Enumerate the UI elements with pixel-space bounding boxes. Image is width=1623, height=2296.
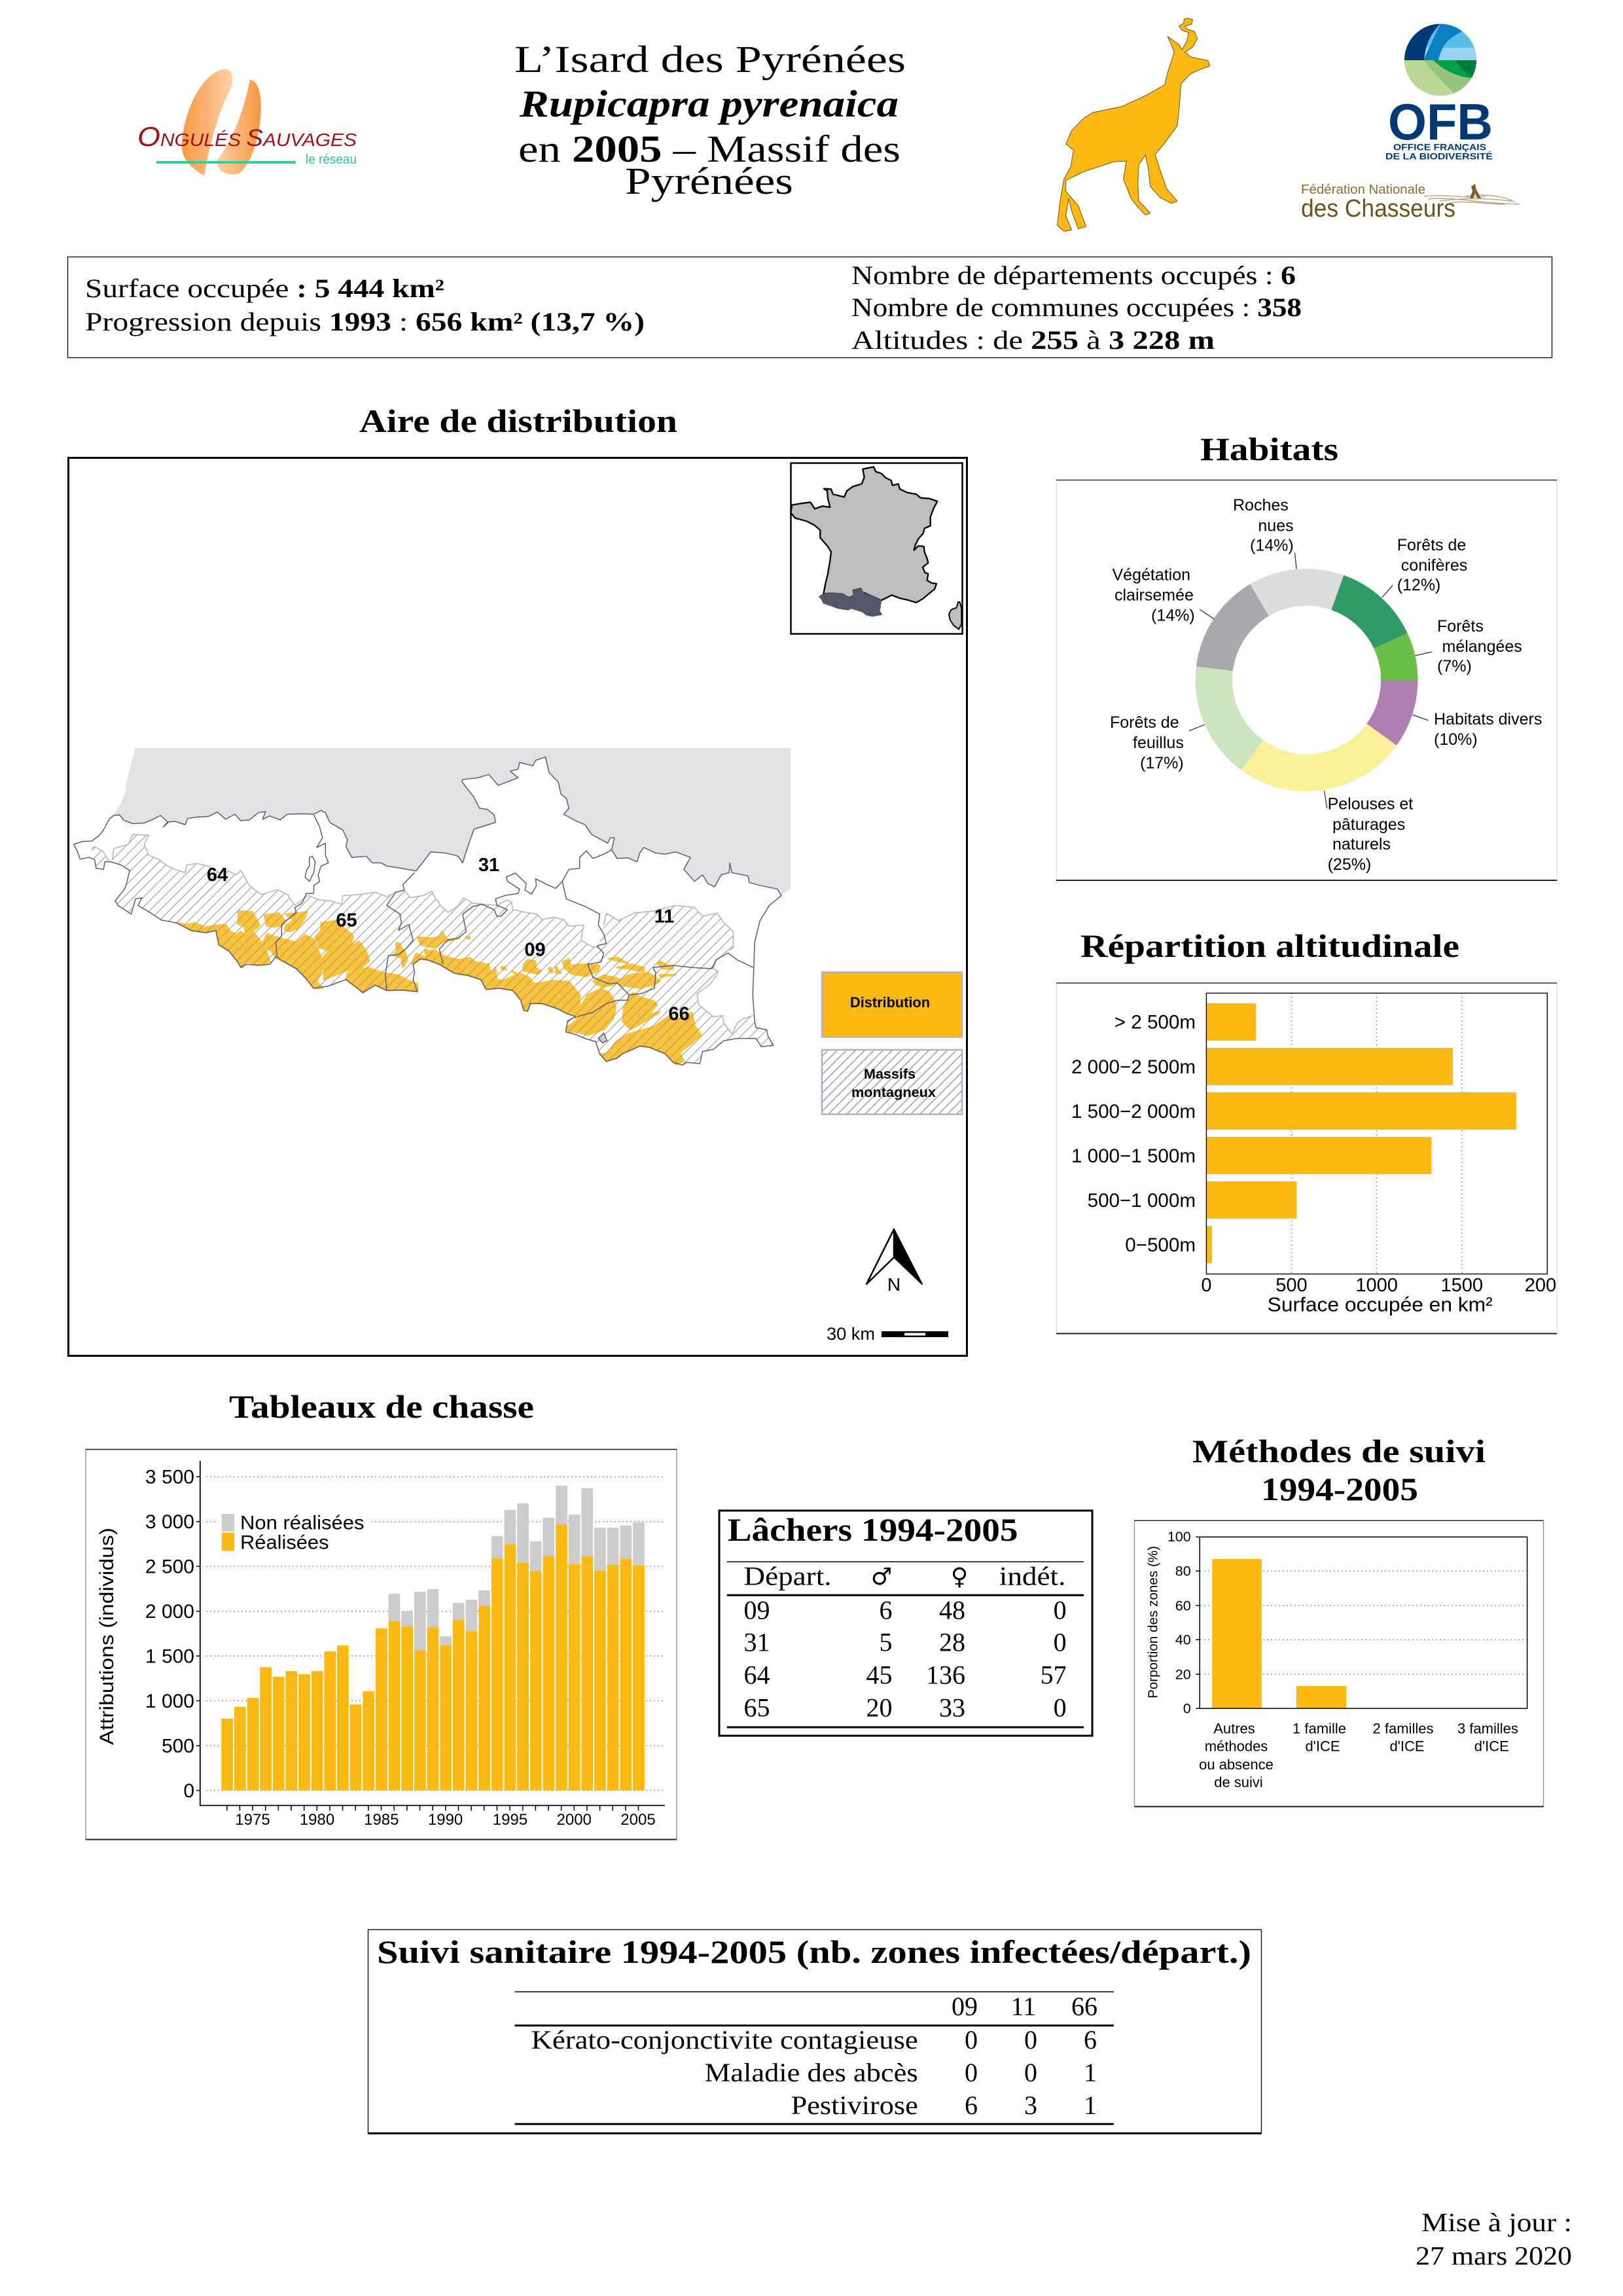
panel: habitats — [1056, 480, 1557, 880]
altitude axis values: 0 — [1201, 1275, 1211, 1296]
donut labels: pâturages — [1332, 816, 1405, 834]
methods y values: 100 — [1168, 1529, 1191, 1545]
table rows — [531, 2025, 1097, 2120]
table rows: 3 — [1024, 2090, 1037, 2120]
donut leader lines — [1189, 552, 1432, 808]
heading: Méthodes de suivi: Méthodes de suivi — [1192, 1433, 1486, 1469]
hunting y values: 3 000 — [145, 1511, 194, 1533]
logo: OFB: DE LA BIODIVERSITÉ — [1385, 151, 1493, 161]
methods x labels — [1199, 1720, 1518, 1791]
donut labels: nues — [1258, 516, 1294, 535]
icon: OFB landscape disc — [1404, 24, 1478, 97]
logo: Fédération Nationale des Chasseurs: Fédération Nationale — [1301, 183, 1425, 197]
donut labels: (10%) — [1434, 730, 1478, 749]
altitude gridlines — [1292, 993, 1462, 1274]
hunting x values: 2000 — [557, 1811, 592, 1829]
map: department borders east — [439, 757, 781, 1065]
map: department labels: 11 — [654, 906, 674, 927]
hunting x values: 1980 — [300, 1811, 334, 1829]
title: Rupicapra pyrenaica — [519, 82, 899, 125]
update note: Mise à jour : — [1421, 2208, 1572, 2237]
table header — [743, 1562, 1065, 1591]
table rules — [515, 1991, 1114, 1992]
methods y values: 40 — [1175, 1632, 1191, 1648]
table header: 66 — [1071, 1992, 1097, 2021]
table rows: 64 — [743, 1660, 770, 1690]
donut labels: Habitats divers — [1434, 710, 1542, 728]
map: massif outlines west — [92, 834, 459, 912]
table rows: 20 — [866, 1693, 893, 1723]
update note — [1416, 2208, 1572, 2270]
icon: north arrow — [866, 1229, 922, 1295]
summary text right — [851, 260, 1302, 355]
logo: Fédération Nationale des Chasseurs: des Chasseurs — [1301, 195, 1455, 223]
donut labels: clairsemée — [1115, 586, 1194, 605]
logo tagline: le réseau — [306, 152, 357, 167]
panel: Lâchers table — [719, 1511, 1092, 1736]
donut labels: conifères — [1401, 556, 1467, 575]
table rows: 48 — [939, 1595, 965, 1624]
methods x labels: d'ICE — [1305, 1738, 1340, 1755]
legend: distribution — [822, 973, 962, 1037]
hunting x values: 1995 — [493, 1811, 527, 1829]
map: department labels: 64 — [207, 865, 228, 886]
methods y title: Porportion des zones (%) — [1146, 1546, 1160, 1698]
methods x labels: de suivi — [1214, 1774, 1263, 1791]
map: distribution areas west — [177, 911, 460, 993]
altitude axis values: 500 — [1275, 1275, 1308, 1296]
methods x labels: méthodes — [1205, 1738, 1268, 1755]
icon: hoof — [182, 69, 261, 175]
map: department labels: 09 — [524, 940, 546, 961]
donut labels: (25%) — [1328, 855, 1371, 874]
table rows: 0 — [1024, 2025, 1037, 2054]
panel: hunting chart — [86, 1449, 677, 1839]
table rows: 1 — [1084, 2058, 1097, 2087]
update note: 27 mars 2020 — [1416, 2241, 1572, 2270]
table header: ♀ — [951, 1564, 968, 1590]
altitude bars — [1206, 1003, 1516, 1263]
map: department borders west — [73, 810, 459, 993]
hunting x values: 1985 — [364, 1811, 399, 1829]
hunting y values — [145, 1467, 194, 1802]
methods x labels: Autres — [1213, 1720, 1255, 1736]
donut labels: Forêts de — [1110, 713, 1179, 732]
hunting y values: 0 — [183, 1780, 194, 1802]
methods y values: 80 — [1175, 1563, 1191, 1579]
donut labels: Végétation — [1113, 565, 1190, 584]
donut labels: feuillus — [1133, 734, 1184, 752]
table rows: 6 — [880, 1595, 893, 1624]
methods x labels: ou absence — [1199, 1756, 1274, 1772]
donut labels: (7%) — [1437, 657, 1472, 675]
summary text left — [85, 274, 645, 336]
table rows: 65 — [743, 1693, 770, 1723]
title: L’Isard des Pyrénées — [514, 38, 906, 81]
altitude category labels: 0−500m — [1125, 1234, 1196, 1256]
hunting y values: 500 — [162, 1736, 194, 1757]
hunting y values: 2 000 — [145, 1601, 194, 1623]
donut chart — [1196, 569, 1418, 791]
heading: Habitats: Habitats — [1200, 431, 1338, 467]
altitude category labels: 500−1 000m — [1088, 1190, 1196, 1211]
table rows: 33 — [939, 1693, 965, 1723]
title — [514, 38, 906, 202]
methods x labels: d'ICE — [1389, 1738, 1425, 1755]
table title: Suivi sanitaire 1994-2005 (nb. zones infectées/départ.) — [377, 1933, 1251, 1970]
scale bar — [827, 1324, 948, 1344]
hunting legend: Non réalisées — [240, 1513, 364, 1534]
legend: massifs montagneux: Massifs — [864, 1066, 916, 1082]
map: department labels: 31 — [478, 855, 499, 876]
map: department labels — [207, 855, 690, 1025]
altitude axis title: Surface occupée en km² — [1268, 1293, 1493, 1316]
donut labels: naturels — [1332, 835, 1391, 853]
methods y values: 20 — [1175, 1666, 1191, 1682]
summary text left: Surface occupée : 5 444 km² — [85, 274, 444, 303]
map: massif outlines east — [458, 898, 753, 1043]
methods x labels: 2 familles — [1373, 1720, 1433, 1736]
logo rule — [156, 161, 296, 164]
table header: indét. — [999, 1562, 1065, 1591]
altitude category labels: 1 000−1 500m — [1071, 1145, 1196, 1167]
altitude axis values: 200 — [1525, 1275, 1556, 1296]
table rules — [727, 1561, 1084, 1562]
hunting legend — [218, 1511, 368, 1554]
table header — [952, 1992, 1097, 2021]
altitude category labels: 2 000−2 500m — [1071, 1056, 1196, 1078]
hunting x values: 2005 — [620, 1811, 656, 1829]
donut labels: (14%) — [1151, 607, 1195, 625]
table header: Départ. — [743, 1562, 831, 1591]
table rows: 28 — [939, 1628, 965, 1657]
donut labels: Pelouses et — [1328, 795, 1413, 814]
altitude category labels: 1 500−2 000m — [1071, 1101, 1196, 1122]
hunting gridlines — [206, 1477, 664, 1791]
map: massifs hatch — [92, 835, 772, 1064]
table rows: 0 — [965, 2058, 978, 2087]
icon: isard silhouette — [1057, 18, 1210, 231]
logo: Ongulés Sauvages — [137, 69, 357, 175]
table header: ♂ — [871, 1564, 892, 1590]
logo: OFB — [1385, 24, 1493, 161]
methods x labels: 1 famille — [1293, 1720, 1346, 1736]
legend: massifs montagneux: montagneux — [851, 1085, 936, 1100]
donut labels — [1110, 496, 1542, 874]
methods x labels: 3 familles — [1457, 1720, 1518, 1736]
table rows: 45 — [866, 1660, 893, 1690]
panel: summary — [68, 257, 1552, 357]
altitude category labels — [1071, 1012, 1196, 1256]
donut labels: mélangées — [1442, 637, 1522, 656]
table rows: 6 — [965, 2090, 978, 2120]
hunting x values: 1990 — [428, 1811, 463, 1829]
legend: massifs montagneux — [822, 1050, 962, 1114]
methods x labels: d'ICE — [1474, 1738, 1509, 1755]
table rows: 6 — [1084, 2025, 1097, 2054]
methods y values: 0 — [1183, 1700, 1191, 1716]
methods frame — [1200, 1537, 1527, 1708]
hunting y values: 3 500 — [145, 1467, 194, 1488]
heading: Méthodes de suivi — [1192, 1433, 1486, 1507]
summary text right: Nombre de départements occupés : 6 — [851, 260, 1296, 290]
donut labels: (14%) — [1250, 537, 1294, 555]
OFB wordmark: OFB — [1388, 93, 1493, 151]
hunting legend: Réalisées — [240, 1532, 329, 1554]
table rows: 57 — [1041, 1660, 1067, 1690]
heading: Aire de distribution: Aire de distribution — [359, 403, 677, 439]
table header: 09 — [952, 1992, 978, 2021]
logo: Fédération Nationale des Chasseurs — [1301, 183, 1520, 223]
hunting y values: 1 000 — [145, 1691, 194, 1712]
hunting x values — [235, 1811, 656, 1829]
summary text right: Nombre de communes occupées : 358 — [851, 293, 1302, 322]
donut labels: Roches — [1233, 496, 1289, 514]
map: department labels: 66 — [668, 1004, 690, 1025]
methods y values — [1168, 1529, 1191, 1716]
summary text left: Progression depuis 1993 : 656 km² (13,7 %) — [85, 307, 645, 336]
table rows: 5 — [880, 1628, 893, 1657]
table rows — [743, 1595, 1067, 1723]
altitude frame — [1206, 993, 1547, 1274]
map: neighbouring territory — [114, 748, 791, 916]
methods gridlines — [1200, 1571, 1527, 1674]
altitude axis values — [1201, 1275, 1556, 1296]
table header: 11 — [1010, 1992, 1036, 2021]
panel: distribution map — [68, 458, 967, 1356]
hunting y values: 1 500 — [145, 1646, 194, 1668]
heading: Tableaux de chasse: Tableaux de chasse — [229, 1388, 534, 1425]
altitude category labels: > 2 500m — [1115, 1012, 1196, 1033]
logo wordmark: ONGULÉS SAUVAGES — [137, 121, 357, 152]
donut labels: (17%) — [1140, 754, 1184, 772]
hunting x values: 1975 — [235, 1811, 270, 1829]
table rows: Kérato-conjonctivite contagieuse — [531, 2025, 918, 2054]
methods bars — [1212, 1559, 1346, 1708]
table rows: Maladie des abcès — [705, 2058, 918, 2087]
summary text right: Altitudes : de 255 à 3 228 m — [851, 325, 1215, 355]
hunting axes — [200, 1461, 665, 1805]
title: en 2005 – Massif des — [518, 128, 901, 170]
stacked bars — [221, 1486, 645, 1791]
heading: Méthodes de suivi: 1994-2005 — [1261, 1471, 1418, 1507]
table rows: 0 — [1054, 1595, 1067, 1624]
hunting y title: Attributions (individus) — [96, 1528, 118, 1745]
map: departments land east — [458, 757, 781, 1065]
table rows: 136 — [926, 1660, 965, 1690]
table rows: 31 — [743, 1628, 770, 1657]
scale bar: 30 km — [827, 1324, 875, 1344]
table rows: 0 — [965, 2025, 978, 2054]
title: Pyrénées — [625, 160, 793, 202]
donut labels: Forêts de — [1397, 536, 1466, 554]
map: distribution areas east — [458, 937, 701, 1065]
donut labels: (12%) — [1397, 576, 1440, 594]
donut labels: Forêts — [1437, 617, 1484, 636]
table rows: 1 — [1084, 2090, 1097, 2120]
table rows: 0 — [1054, 1693, 1067, 1723]
icon: north arrow: N — [887, 1274, 901, 1295]
table rows: 0 — [1024, 2058, 1037, 2087]
table rows: Pestivirose — [791, 2090, 918, 2120]
methods y values: 60 — [1175, 1598, 1191, 1614]
map: departments land west — [73, 810, 459, 993]
panel: altitude chart — [1056, 983, 1557, 1334]
heading: Répartition altitudinale: Répartition altitudinale — [1080, 927, 1459, 964]
map: department labels: 65 — [336, 910, 357, 931]
altitude axis values: 1000 — [1355, 1275, 1398, 1296]
panel: health monitoring table — [368, 1929, 1262, 2134]
altitude axis values: 1500 — [1440, 1275, 1483, 1296]
hunting y values: 2 500 — [145, 1556, 194, 1578]
panel: monitoring methods chart — [1135, 1520, 1543, 1806]
legend: distribution: Distribution — [850, 994, 930, 1011]
inset map: France — [791, 463, 962, 634]
table rows: 0 — [1054, 1628, 1067, 1657]
logo: OFB: OFFICE FRANÇAIS — [1393, 141, 1486, 152]
table title: Lâchers 1994-2005 — [728, 1511, 1018, 1548]
table rows: 09 — [743, 1595, 770, 1624]
